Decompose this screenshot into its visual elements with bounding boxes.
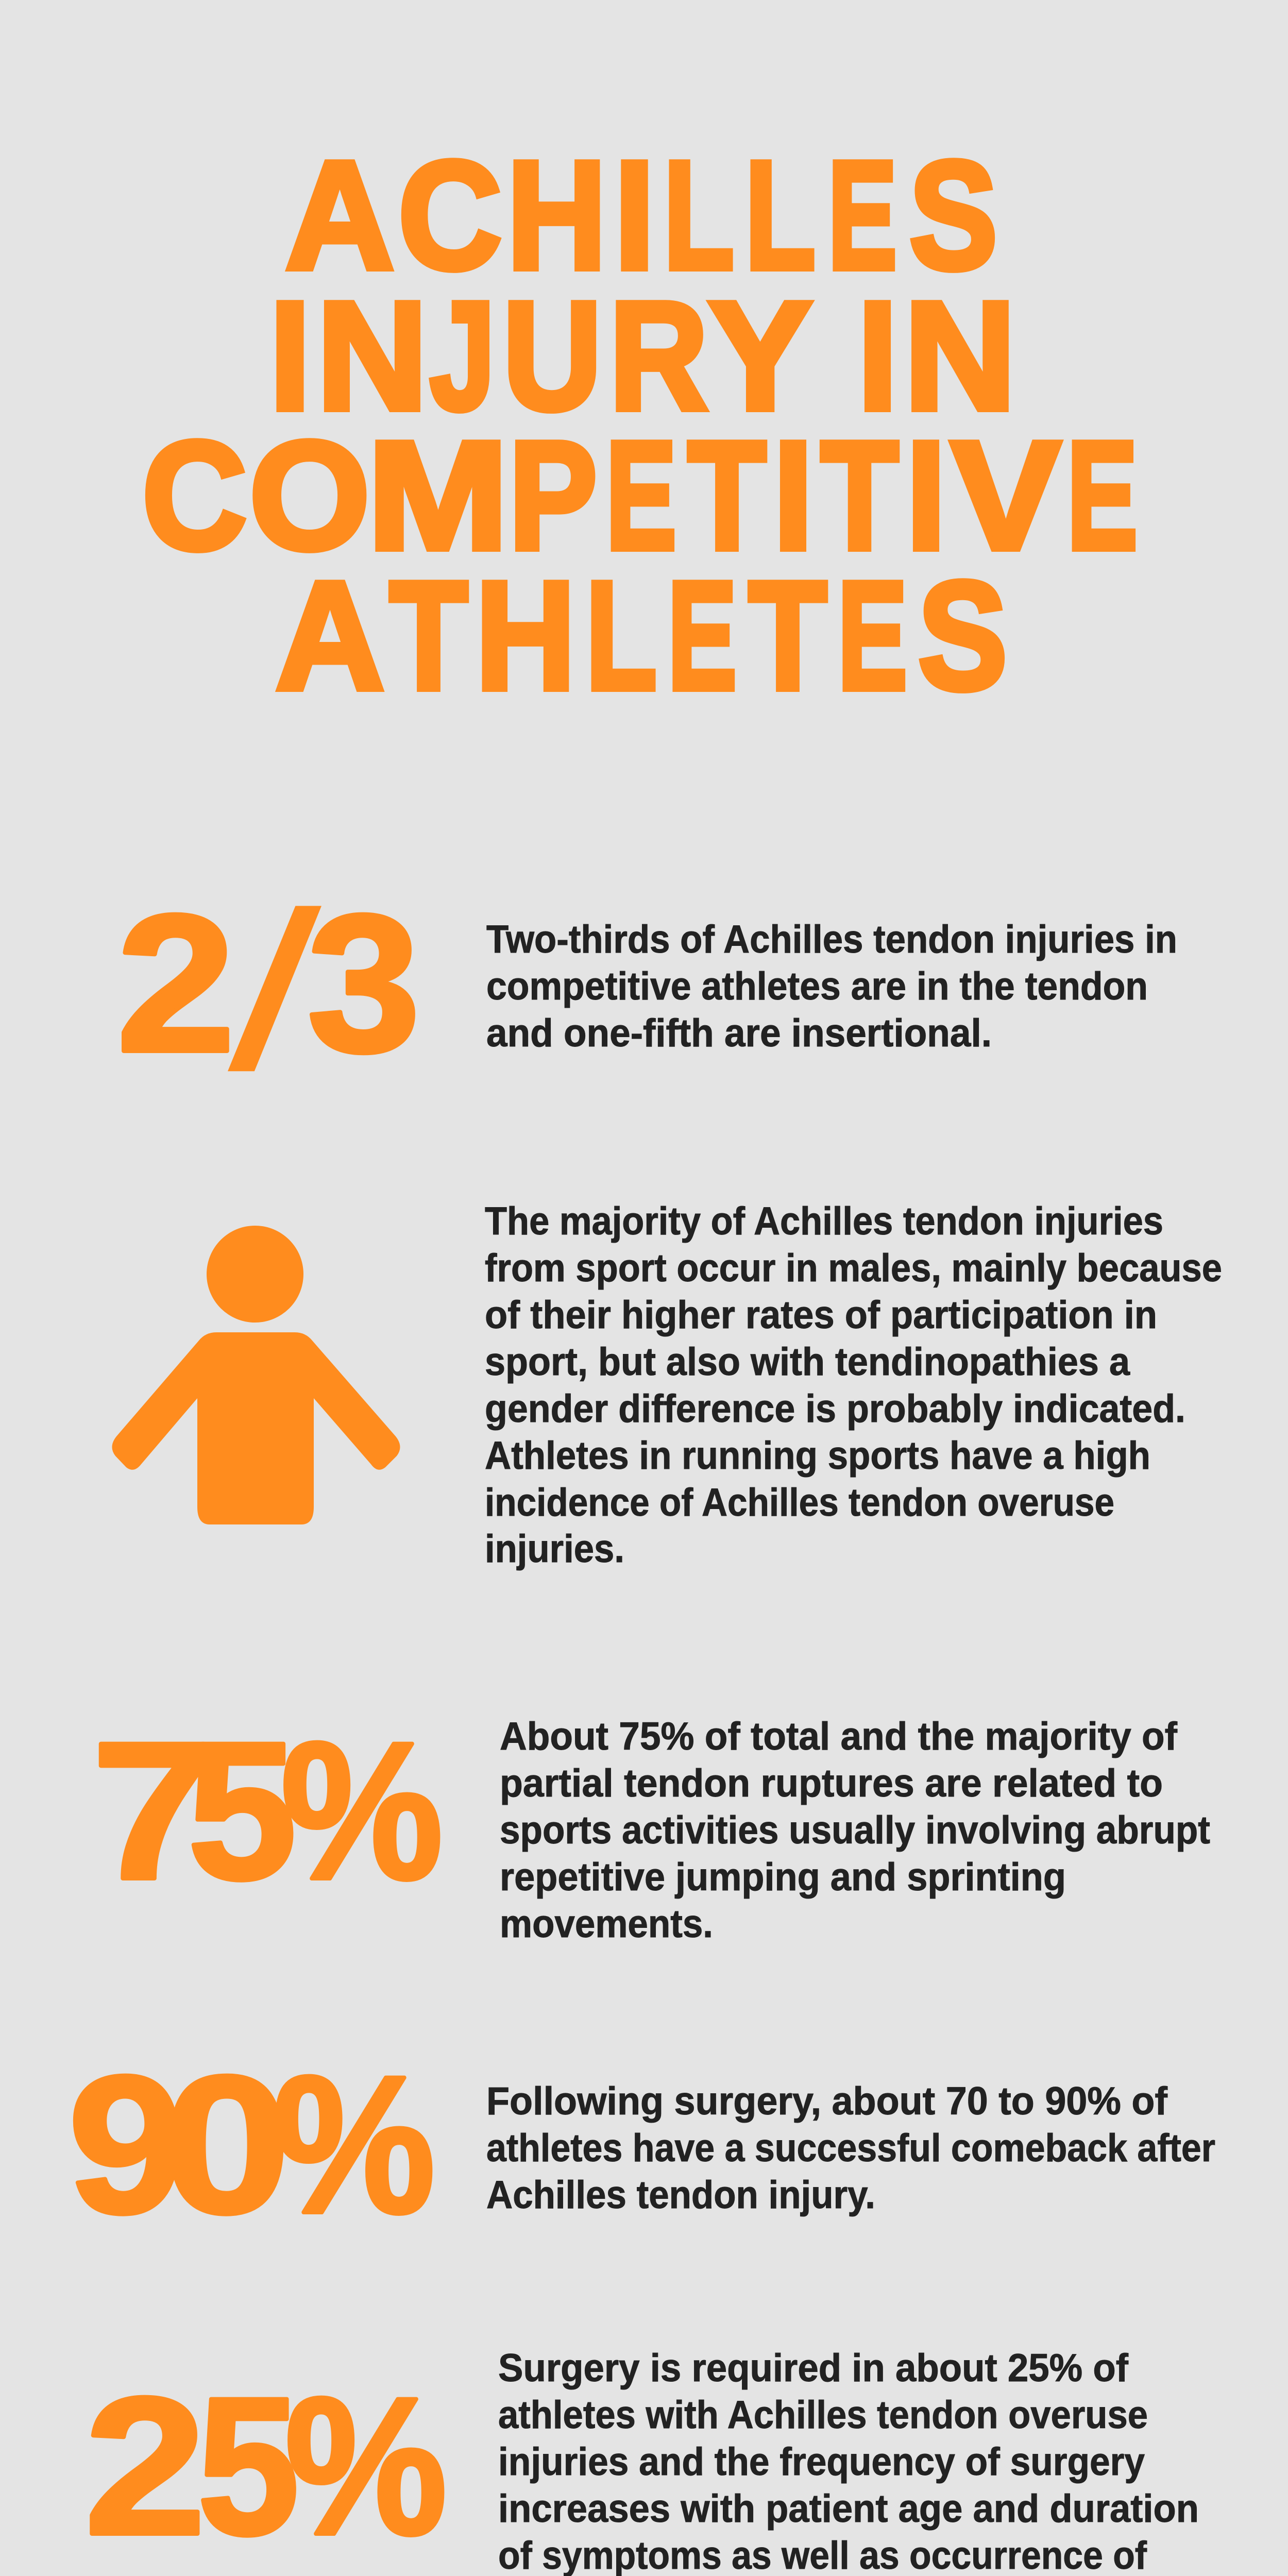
text block: injuries. bbox=[485, 1527, 624, 1571]
text block: competitive athletes are in the tendon bbox=[486, 964, 1148, 1008]
title: S bbox=[918, 550, 1007, 722]
title: V bbox=[951, 410, 1061, 582]
title: L bbox=[745, 129, 816, 301]
big number: 2/3: 3 bbox=[307, 874, 420, 1093]
title: H bbox=[507, 129, 606, 301]
text block: movements. bbox=[500, 1902, 713, 1946]
title: J bbox=[430, 270, 495, 442]
title: I bbox=[858, 270, 897, 442]
text block: Following surgery, about 70 to 90% of bbox=[486, 2079, 1168, 2123]
title: T bbox=[749, 550, 827, 722]
title: R bbox=[609, 270, 708, 442]
text block: sports activities usually involving abrupt bbox=[500, 1808, 1210, 1852]
big number: 90%: 9 bbox=[68, 2035, 185, 2254]
title: S bbox=[909, 129, 997, 301]
text block: Surgery is required in about 25% of bbox=[498, 2346, 1129, 2390]
text block bbox=[498, 2346, 1199, 2576]
text block: Two-thirds of Achilles tendon injuries in bbox=[486, 918, 1177, 961]
title: I bbox=[269, 270, 311, 442]
title: A bbox=[285, 129, 394, 301]
title: E bbox=[606, 410, 676, 582]
title: C bbox=[142, 410, 247, 582]
title: I bbox=[773, 410, 813, 582]
big number: 90%: 0 bbox=[163, 2035, 291, 2254]
text block: increases with patient age and duration bbox=[498, 2487, 1199, 2531]
title: E bbox=[1067, 410, 1138, 582]
text block: gender difference is probably indicated. bbox=[485, 1387, 1185, 1431]
big number: 75%: 5 bbox=[188, 1701, 297, 1920]
title: L bbox=[664, 129, 734, 301]
title: U bbox=[503, 270, 602, 442]
text block bbox=[485, 1199, 1222, 1571]
text block: sport, but also with tendinopathies a bbox=[485, 1340, 1130, 1384]
title: N bbox=[904, 270, 1016, 442]
big number: 25% bbox=[84, 2357, 447, 2575]
big number: 25%: 2 bbox=[84, 2357, 206, 2575]
title: L bbox=[586, 550, 657, 722]
title: C bbox=[398, 129, 502, 301]
text block: Achilles tendon injury. bbox=[486, 2173, 875, 2217]
big number: 2/3: 2 bbox=[116, 874, 235, 1093]
text block: partial tendon ruptures are related to bbox=[500, 1761, 1163, 1805]
title: E bbox=[828, 129, 897, 301]
text block: athletes with Achilles tendon overuse bbox=[498, 2393, 1148, 2437]
big number: 25%: 5 bbox=[197, 2357, 299, 2575]
title bbox=[142, 129, 1138, 722]
big number: 90%: % bbox=[273, 2035, 435, 2254]
text block: incidence of Achilles tendon overuse bbox=[485, 1481, 1114, 1524]
title: Y bbox=[708, 270, 812, 442]
text block: from sport occur in males, mainly because bbox=[485, 1246, 1222, 1290]
text block: of their higher rates of participation in bbox=[485, 1293, 1157, 1337]
title: H bbox=[476, 550, 575, 722]
text block: and one-fifth are insertional. bbox=[486, 1011, 992, 1055]
text block: About 75% of total and the majority of bbox=[500, 1715, 1178, 1758]
title: E bbox=[838, 550, 907, 722]
title: T bbox=[688, 410, 766, 582]
title: M bbox=[367, 410, 509, 582]
icon: person bbox=[112, 1226, 400, 1524]
title: A bbox=[276, 550, 384, 722]
panel: two-thirds stat bbox=[116, 865, 1177, 1117]
big number: 2/3 bbox=[116, 865, 420, 1117]
title: O bbox=[249, 410, 370, 582]
title: E bbox=[668, 550, 737, 722]
text block: The majority of Achilles tendon injuries bbox=[485, 1199, 1163, 1243]
big number: 75% bbox=[92, 1701, 443, 1920]
panel: male athletes bbox=[112, 1199, 1222, 1571]
panel: 90% stat bbox=[68, 2035, 1215, 2254]
text block: athletes have a successful comeback after bbox=[486, 2126, 1215, 2170]
big number: 2/3: / bbox=[228, 865, 323, 1117]
big number: 90% bbox=[68, 2035, 435, 2254]
title: I bbox=[614, 129, 655, 301]
text block bbox=[486, 918, 1177, 1055]
panel: 25% stat bbox=[84, 2346, 1199, 2576]
big number: 75%: % bbox=[281, 1701, 443, 1920]
panel: 75% stat bbox=[92, 1701, 1210, 1946]
big number: 75%: 7 bbox=[92, 1701, 213, 1920]
title: P bbox=[509, 410, 597, 582]
text block bbox=[500, 1715, 1210, 1946]
text block bbox=[486, 2079, 1215, 2217]
text block: repetitive jumping and sprinting bbox=[500, 1855, 1066, 1899]
big number: 25%: % bbox=[285, 2357, 447, 2575]
text block: Athletes in running sports have a high bbox=[485, 1434, 1150, 1478]
text block: injuries and the frequency of surgery bbox=[498, 2440, 1145, 2484]
title: T bbox=[389, 550, 468, 722]
title: N bbox=[317, 270, 428, 442]
title: I bbox=[906, 410, 946, 582]
title: T bbox=[821, 410, 899, 582]
